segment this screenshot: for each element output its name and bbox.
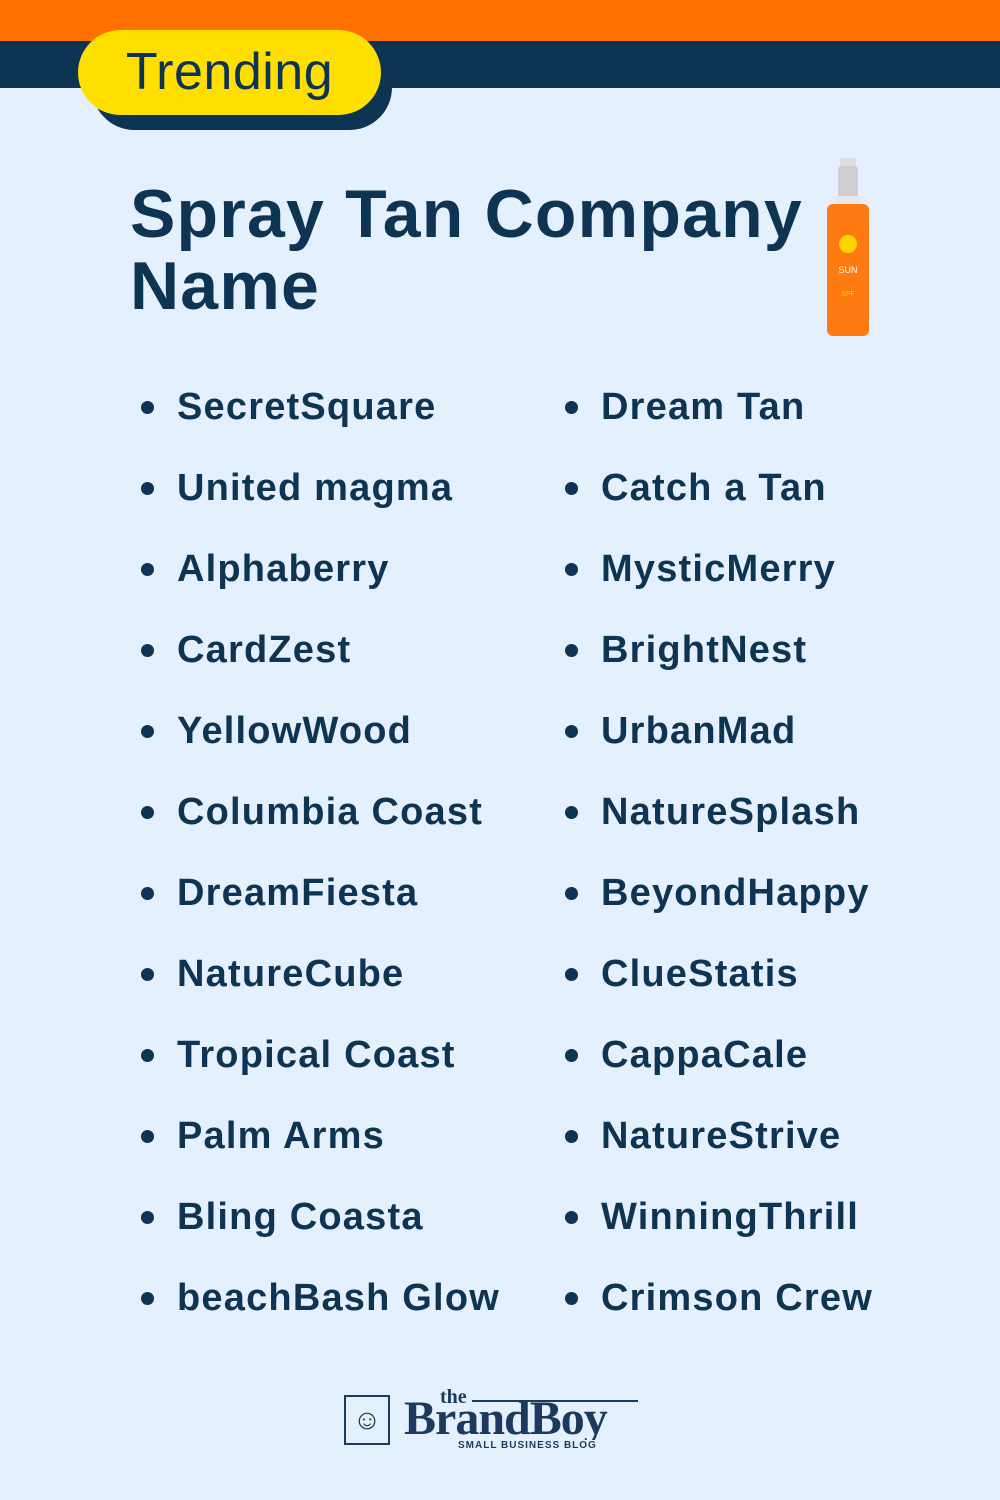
list: column 2 [565, 386, 873, 1319]
list: column 1: United magma [177, 467, 453, 509]
list: column 1: DreamFiesta [177, 872, 418, 914]
list: column 2: Crimson Crew [601, 1277, 873, 1319]
list: column 2: UrbanMad [601, 710, 796, 752]
logo: the BrandBoy: SMALL BUSINESS BLOG [458, 1440, 597, 1451]
list: column 1: Tropical Coast [177, 1034, 456, 1076]
list: column 1: Palm Arms [177, 1115, 385, 1157]
list: column 1 [141, 386, 500, 1319]
list: column 2: BrightNest [601, 629, 807, 671]
top orange bar [0, 0, 1000, 41]
list: column 1: Columbia Coast [177, 791, 483, 833]
icon: sunscreen bottle [827, 158, 869, 336]
badge: trending [78, 30, 392, 130]
list: column 2: Catch a Tan [601, 467, 827, 509]
list: column 2: NatureStrive [601, 1115, 841, 1157]
list: column 2: ClueStatis [601, 953, 799, 995]
list: column 1: SecretSquare [177, 386, 436, 428]
list: column 1: CardZest [177, 629, 351, 671]
list: column 1: Alphaberry [177, 548, 390, 590]
title: Spray Tan Company [130, 176, 803, 252]
title: Name [130, 248, 320, 324]
logo: the BrandBoy [344, 1386, 638, 1451]
icon: sunscreen bottle: SPF [841, 291, 855, 298]
icon: sunscreen bottle: SUN [838, 265, 858, 275]
list: column 2: WinningThrill [601, 1196, 859, 1238]
list: column 2: CappaCale [601, 1034, 808, 1076]
list: column 2: MysticMerry [601, 548, 836, 590]
list: column 1: beachBash Glow [177, 1277, 500, 1319]
list: column 2: BeyondHappy [601, 872, 870, 914]
logo: the BrandBoy: ☺ [353, 1404, 381, 1435]
list: column 1: NatureCube [177, 953, 404, 995]
list: column 1: YellowWood [177, 710, 412, 752]
logo: the BrandBoy: BrandBoy [404, 1392, 607, 1445]
logo: the BrandBoy: the [440, 1386, 467, 1408]
top navy bar [0, 41, 1000, 88]
badge: trending: Trending [126, 43, 333, 101]
list: column 1: Bling Coasta [177, 1196, 424, 1238]
list: column 2: Dream Tan [601, 386, 805, 428]
list: column 2: NatureSplash [601, 791, 860, 833]
title [130, 176, 803, 324]
